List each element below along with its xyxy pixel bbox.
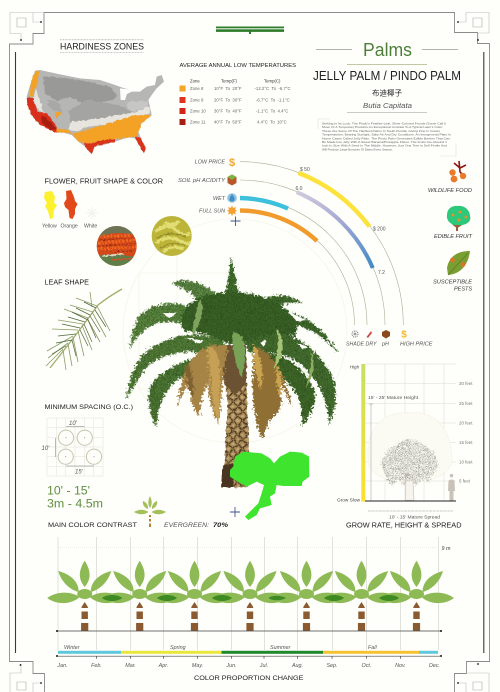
legend: average annual low temperatures: -1.1°C To 4.4°C	[256, 108, 288, 114]
section: main color contrast: MAIN COLOR CONTRAST	[48, 522, 137, 529]
section: flower, fruit shape and color	[42, 178, 163, 230]
light hanging fronds	[192, 300, 314, 388]
section: minimum spacing: 10' - 15'	[47, 486, 90, 498]
map: US hardiness zones	[27, 70, 164, 154]
season labels: Fall	[368, 645, 377, 651]
arc row labels and icons: FULL SUN	[199, 208, 225, 214]
frond bases	[219, 345, 247, 395]
arc: price range	[298, 173, 370, 226]
arc value labels	[296, 167, 386, 276]
yellow flower shape	[44, 191, 57, 219]
description text block: Move Or A Turquoise) Products An Exceptional Contrast To A Typical Lawn's Color.	[322, 125, 443, 129]
month labels: Sep.	[326, 663, 338, 669]
icon: pH	[382, 330, 390, 338]
legend: average annual low temperatures: 30°F To 40°F	[214, 108, 242, 114]
month labels: Jul.	[259, 663, 268, 669]
arc value labels: 7.2	[378, 270, 385, 276]
arc end labels and icons: DRY	[366, 342, 377, 348]
arc value labels: $ 50	[300, 167, 310, 173]
arc: water range	[240, 198, 288, 208]
icon: water	[227, 193, 237, 203]
title block: JELLY PALM / PINDO PALM	[313, 69, 461, 83]
chart: grow rate, height and spread: 10 feet	[459, 460, 473, 464]
description text block: Striking In Its Look, The Pindo's Feather-Leaf, Silver-Colored Fronds (Some Call It	[322, 122, 446, 126]
season labels: Summer	[270, 645, 291, 651]
season labels: Spring	[170, 645, 186, 651]
photo: yellow flowers	[151, 215, 193, 257]
legend: average annual low temperatures: Temp(C)	[264, 78, 281, 84]
section: minimum spacing	[42, 404, 133, 510]
icon: small palm	[134, 496, 166, 527]
frond texture	[127, 258, 337, 426]
month labels: Dec.	[429, 663, 440, 669]
section: flower, fruit shape and color: FLOWER, FRUIT SHAPE & COLOR	[44, 178, 163, 186]
month gridlines	[58, 537, 438, 650]
heading: hardiness zones: HARDINESS ZONES	[60, 42, 144, 52]
legend: average annual low temperatures: 10°F To 20°F	[214, 86, 242, 91]
month labels	[56, 663, 440, 669]
section: minimum spacing: 10'	[42, 446, 50, 452]
chart: grow rate, height and spread: 15 feet	[459, 440, 473, 445]
legend: average annual low temperatures: Zone 11	[190, 120, 206, 124]
arc chart: tolerance ranges	[240, 162, 403, 325]
arc row labels and icons: SOIL pH ACIDITY	[178, 178, 225, 184]
section: minimum spacing: MINIMUM SPACING (O.C.)	[44, 404, 133, 411]
icon: edible fruit: EDIBLE FRUIT	[434, 234, 473, 240]
month labels: May.	[192, 663, 203, 669]
month labels: Apr.	[158, 663, 168, 669]
green mask shape over trunk	[230, 452, 309, 520]
tree sketch	[381, 439, 439, 500]
growth bar	[361, 364, 365, 502]
section: minimum spacing: 10'	[69, 421, 78, 427]
section: flower, fruit shape and color: Orange	[60, 224, 78, 230]
arc end labels and icons: SHADE	[346, 342, 364, 348]
arc row labels and icons: WET	[213, 196, 226, 202]
section: minimum spacing: 15'	[75, 470, 84, 476]
arc value labels: 6.0	[296, 186, 303, 192]
ground line	[57, 630, 441, 632]
month labels: Jan.	[56, 663, 68, 669]
legend: average annual low temperatures: Zone 10	[190, 108, 206, 114]
legend: average annual low temperatures: Zone 9	[190, 97, 204, 102]
arc end labels and icons: pH	[381, 342, 389, 348]
legend: average annual low temperatures: -6.7°C To -1.1°C	[256, 97, 290, 102]
month labels: Mar.	[125, 663, 136, 669]
section: main color contrast: 70%	[213, 522, 229, 529]
icon: susceptible pests: SUSCEPTIBLE	[433, 280, 472, 286]
chart: color proportion change: COLOR PROPORTION CHANGE	[194, 675, 304, 682]
chart: grow rate, height and spread	[337, 364, 473, 530]
right column icons	[428, 161, 473, 292]
legend: average annual low temperatures	[180, 63, 297, 125]
season labels	[64, 645, 377, 651]
arc row labels and icons: LOW PRICE	[195, 160, 225, 166]
month labels: Nov.	[395, 663, 406, 669]
arc row labels and icons	[178, 157, 240, 226]
palm tree illustration	[126, 258, 339, 487]
orange fruit shape	[64, 190, 78, 219]
arc end labels and icons: HIGH PRICE	[400, 342, 433, 348]
human scale figure	[448, 474, 455, 501]
title block: Butia Capitata	[363, 101, 412, 110]
chart: grow rate, height and spread: 10' - 15' Mature Spread	[389, 514, 441, 520]
chart: grow rate, height and spread: 30 feet	[459, 381, 473, 386]
month labels: Feb.	[91, 663, 102, 669]
legend: average annual low temperatures: Zone	[190, 78, 200, 84]
description text block: Temperatures, Bearing Sunlight, Salty Air And Dry Conditions. An Intergeneral Plant In	[322, 133, 451, 137]
legend: average annual low temperatures: Temp(F)	[221, 78, 238, 84]
description text block: These Are Some Of The Hardiest Palms In South Florida, Giving Fine In Cooler	[322, 129, 440, 133]
chart: grow rate, height and spread: 25 feet	[459, 401, 473, 406]
arc: sun range	[240, 210, 317, 241]
description text block: Will Produce Large Bunches Of Dates Every Season.	[322, 147, 393, 151]
arc value labels: $ 200	[373, 226, 386, 232]
chart: color proportion change: 9 m	[442, 546, 451, 552]
white flower shape	[86, 207, 98, 219]
chart: grow rate, height and spread: Grow Slow	[337, 498, 361, 502]
icon: susceptible pests: PESTS	[454, 286, 472, 292]
baseline	[365, 500, 456, 502]
faint guide circle behind palm	[123, 219, 347, 443]
icon: dry	[366, 331, 372, 338]
description text block: Inch In Size With A Seed In The Middle. However, Just One Tree Is Self-Fertile And	[322, 144, 447, 148]
chart: grow rate, height and spread: 15' - 25' Mature Height	[368, 395, 419, 400]
section: minimum spacing: 3m - 4.5m	[47, 498, 103, 510]
arc: soil pH range	[296, 192, 373, 268]
leaf illustration	[46, 289, 122, 370]
legend: average annual low temperatures: 40°F To 50°F	[214, 120, 242, 124]
arc row labels and icons: $	[229, 157, 235, 169]
section: flower, fruit shape and color: Yellow	[42, 224, 57, 230]
season color bar	[58, 651, 438, 654]
section: leaf shape	[44, 280, 122, 370]
section: main color contrast: EVERGREEN:	[164, 522, 209, 529]
plus marker	[230, 507, 240, 517]
icon: susceptible pests	[433, 251, 472, 292]
trunk	[222, 380, 249, 487]
faint mature tree outline	[368, 413, 452, 483]
dead brown fronds	[177, 344, 292, 439]
legend: average annual low temperatures: -12.2°C To -6.7°C	[254, 86, 291, 91]
description text block: Be Made Into Jelly With A Sweet Banana/Pineapple Flavor. The Fruits Are Abound 1	[322, 140, 447, 144]
chart: grow rate, height and spread: 5 feet	[459, 478, 471, 484]
month labels: Oct.	[362, 663, 371, 669]
icon: shade	[352, 331, 358, 337]
leaf overlaps	[102, 595, 399, 601]
title block	[313, 40, 461, 112]
top green bar	[216, 26, 284, 34]
legend: average annual low temperatures: AVERAGE ANNUAL LOW TEMPERATURES	[180, 63, 297, 69]
gaps between fronds	[162, 290, 308, 350]
chart: grow rate, height and spread: High	[350, 364, 360, 370]
section: leaf shape: LEAF SHAPE	[44, 280, 89, 287]
title block: 布迪椰子	[372, 88, 402, 98]
section: main color contrast	[48, 496, 229, 529]
icon: plus marker	[230, 216, 240, 226]
height arrow	[369, 404, 373, 501]
arc end labels and icons: $	[401, 330, 407, 340]
chart: grow rate, height and spread: 20 feet	[459, 420, 473, 426]
month labels: Jun.	[225, 663, 237, 669]
legend: average annual low temperatures: Zone 8	[190, 86, 204, 91]
legend: average annual low temperatures: 4.4°C To 10°C	[257, 120, 287, 124]
icon: sun	[227, 206, 237, 216]
icon: soil cube	[228, 174, 236, 186]
row of palm silhouettes	[47, 561, 454, 631]
chart: color proportion change	[47, 537, 454, 682]
grid	[365, 364, 456, 501]
description text block: Home Cases Called Jelly Palm. The Pindo Palm Generates Edible Berries That Can	[322, 136, 450, 140]
green fronds	[126, 258, 339, 427]
title block: Palms	[363, 40, 412, 60]
month labels: Aug.	[291, 663, 303, 669]
month axis	[57, 656, 441, 659]
spacing grid diagram	[47, 418, 103, 476]
chart: grow rate, height and spread: GROW RATE, HEIGHT & SPREAD	[346, 520, 462, 530]
section: flower, fruit shape and color: White	[84, 224, 97, 230]
season labels: Winter	[64, 645, 80, 651]
photo: orange fruit cluster	[96, 225, 138, 267]
legend: average annual low temperatures: 20°F To 30°F	[214, 97, 242, 102]
description text block	[318, 119, 456, 156]
icon: wildlife food: WILDLIFE FOOD	[428, 188, 472, 194]
arc end labels and icons	[346, 330, 433, 348]
